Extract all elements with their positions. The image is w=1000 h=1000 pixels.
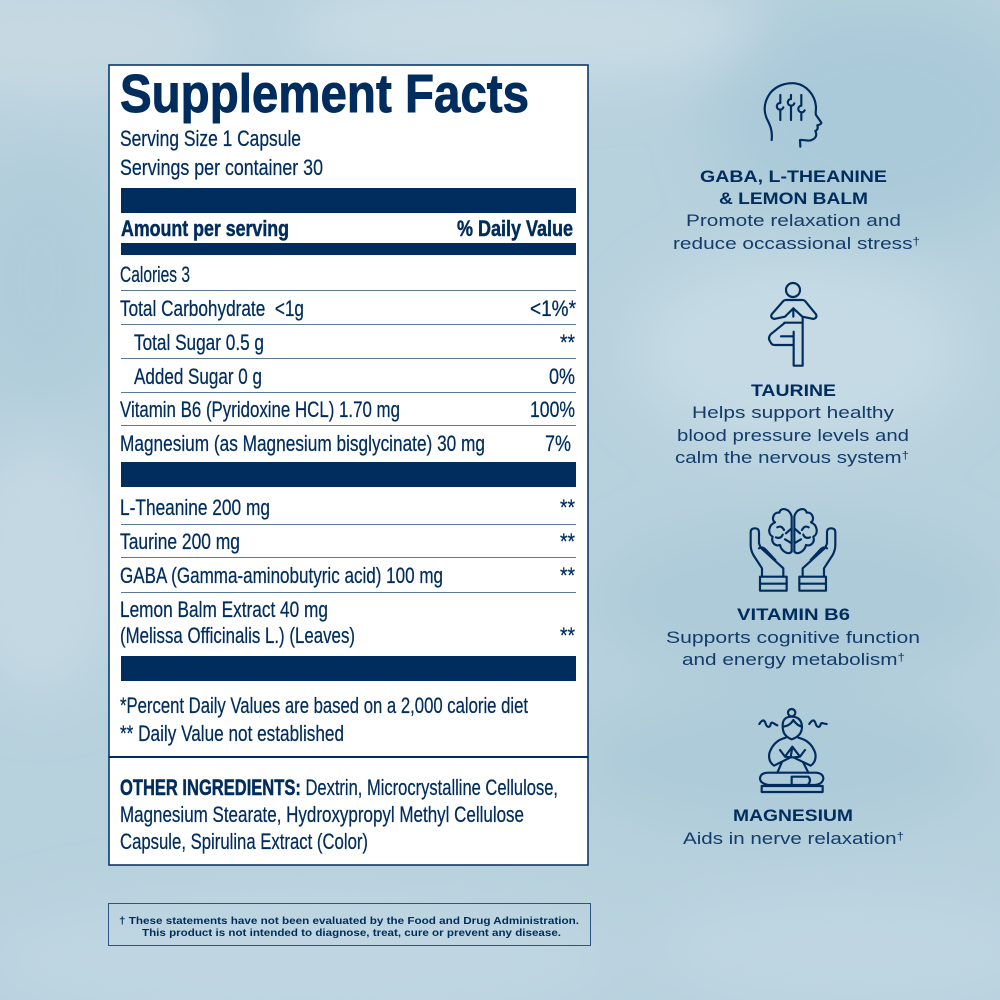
serving info: Serving Size 1 Capsule: [120, 126, 301, 151]
botanical rows: **: [560, 495, 575, 520]
other ingredients: OTHER INGREDIENTS: Dextrin, Microcrystalline Cellulose,: [120, 775, 558, 800]
benefit: Vitamin B6: †: [898, 652, 905, 664]
benefit: Taurine: calm the nervous system: [675, 448, 863, 467]
benefit: GABA, L-Theanine and Lemon Balm: [673, 168, 920, 253]
icon: head with sliders: [765, 83, 821, 147]
nutrient rows: 100%: [530, 397, 575, 422]
nutrient rows: 0%: [549, 364, 575, 389]
benefit: Taurine: blood pressure levels and: [677, 426, 909, 445]
benefit: GABA, L-Theanine and Lemon Balm: GABA, L-THEANINE: [700, 168, 887, 186]
serving info: Servings per container 30: [120, 155, 323, 180]
botanical rows: Lemon Balm Extract 40 mg: [120, 597, 328, 622]
benefit: Vitamin B6: VITAMIN B6: [737, 606, 850, 624]
botanical rows: **: [560, 529, 575, 554]
botanical rows: **: [560, 623, 575, 648]
column headings: % Daily Value: [457, 216, 573, 241]
nutrient rows: Magnesium (as Magnesium bisglycinate) 30 mg: [120, 431, 485, 456]
nutrient rows: Vitamin B6 (Pyridoxine HCL) 1.70 mg: [120, 397, 400, 422]
benefit: Taurine: Helps support healthy: [692, 403, 895, 422]
nutrient rows: Added Sugar 0 g: [134, 364, 262, 389]
benefit: Vitamin B6: and energy metabolism: [682, 650, 859, 669]
benefit: GABA, L-Theanine and Lemon Balm: & LEMON BALM: [719, 190, 868, 208]
nutrient rows: [120, 262, 576, 456]
benefit: Magnesium: †: [897, 831, 904, 843]
benefit: Taurine: [675, 382, 909, 467]
other ingredients: Capsule, Spirulina Extract (Color): [120, 829, 368, 854]
botanical rows: [120, 495, 575, 648]
botanical rows: GABA (Gamma-aminobutyric acid) 100 mg: [120, 563, 443, 588]
disclaimer box: This product is not intended to diagnose, treat, cure or prevent any disease.: [142, 927, 561, 939]
other ingredients: Magnesium Stearate, Hydroxypropyl Methyl Cellulose: [120, 802, 524, 827]
nutrient rows: **: [560, 330, 575, 355]
benefit: Magnesium: Aids in nerve relaxation: [683, 829, 860, 848]
nutrient rows: <1%*: [530, 296, 576, 321]
benefit: Taurine: †: [902, 450, 909, 462]
daily value notes: [120, 693, 528, 746]
benefit: Vitamin B6: [666, 606, 920, 669]
disclaimer box: [108, 904, 590, 946]
daily value notes: ** Daily Value not established: [120, 721, 344, 746]
benefit: GABA, L-Theanine and Lemon Balm: Promote relaxation and: [686, 211, 901, 230]
column headings: [121, 216, 573, 241]
nutrient rows: 7%: [545, 431, 571, 456]
nutrient rows: Total Carbohydrate <1g: [120, 296, 304, 321]
disclaimer box: † These statements have not been evaluated by the Food and Drug Administration.: [119, 915, 579, 927]
other ingredients: [120, 775, 558, 854]
benefit: Taurine: TAURINE: [751, 382, 836, 400]
benefit: GABA, L-Theanine and Lemon Balm: reduce occassional stress: [673, 234, 869, 253]
benefit: Vitamin B6: Supports cognitive function: [666, 628, 920, 647]
table header bars: [121, 188, 576, 681]
botanical rows: L-Theanine 200 mg: [120, 495, 270, 520]
daily value notes: *Percent Daily Values are based on a 2,000 calorie diet: [120, 693, 528, 718]
nutrient rows: Calories 3: [120, 262, 190, 287]
benefit: Magnesium: [683, 807, 904, 848]
nutrient rows: Total Sugar 0.5 g: [134, 330, 264, 355]
botanical rows: **: [560, 563, 575, 588]
icon: meditating figure: [759, 709, 827, 792]
panel: supplement facts label: [109, 64, 588, 865]
benefit: Magnesium: MAGNESIUM: [733, 807, 853, 825]
serving info: [120, 126, 323, 180]
botanical rows: Taurine 200 mg: [120, 529, 240, 554]
icon: hands holding brain: [751, 509, 835, 591]
benefit: GABA, L-Theanine and Lemon Balm: †: [913, 236, 920, 248]
botanical rows: (Melissa Officinalis L.) (Leaves): [120, 623, 355, 648]
title: Supplement Facts: [120, 64, 529, 124]
column headings: Amount per serving: [121, 216, 289, 241]
icon: tree pose: [769, 283, 816, 366]
